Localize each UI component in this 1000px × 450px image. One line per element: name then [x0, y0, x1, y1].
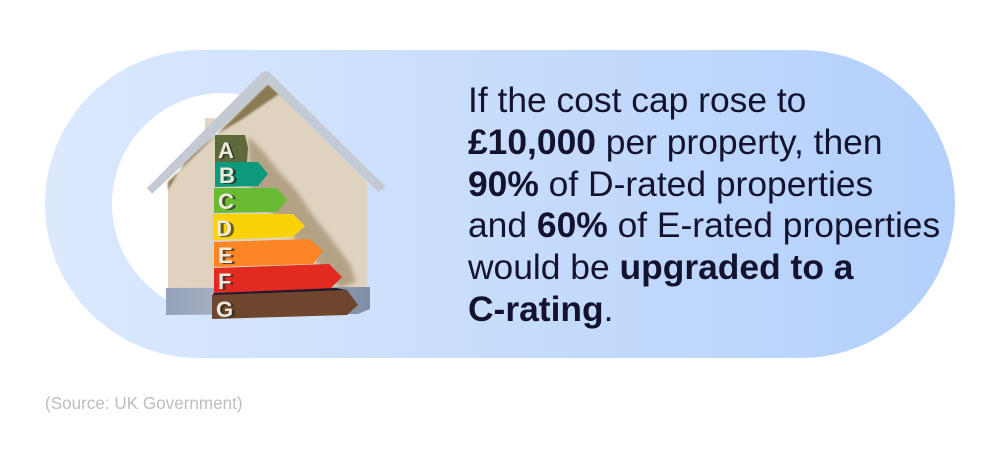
- icon: house with energy rating: A: [220, 139, 236, 164]
- icon: house with energy rating: F: [221, 270, 234, 295]
- icon: house with energy rating: C: [221, 190, 237, 215]
- icon: house with energy rating: C: [218, 189, 234, 214]
- text block: main statement: and 60% of E-rated properties: [468, 205, 940, 245]
- text block: main statement: If the cost cap rose to: [468, 80, 806, 120]
- text block: main statement: £10,000 per property, then: [468, 122, 883, 162]
- source note: (Source: UK Government): [45, 394, 243, 413]
- icon: house with energy rating: E: [221, 244, 236, 269]
- icon: house with energy rating: B: [222, 164, 238, 189]
- icon: house with energy rating: A: [218, 138, 234, 163]
- icon: house with energy rating: G: [216, 297, 233, 322]
- icon: house with energy rating: D: [216, 216, 232, 241]
- text block: main statement: [468, 80, 940, 329]
- icon: house with energy rating: B: [219, 163, 235, 188]
- icon: house with energy rating: [147, 71, 386, 323]
- icon: house with energy rating: G: [219, 298, 236, 323]
- icon: house with energy rating: F: [218, 269, 231, 294]
- text block: main statement: 90% of D-rated properties: [468, 164, 873, 204]
- text block: main statement: C-rating.: [468, 289, 614, 329]
- icon: house with energy rating: E: [218, 243, 233, 268]
- text block: main statement: would be upgraded to a: [468, 247, 853, 287]
- icon: house with energy rating: D: [219, 217, 235, 242]
